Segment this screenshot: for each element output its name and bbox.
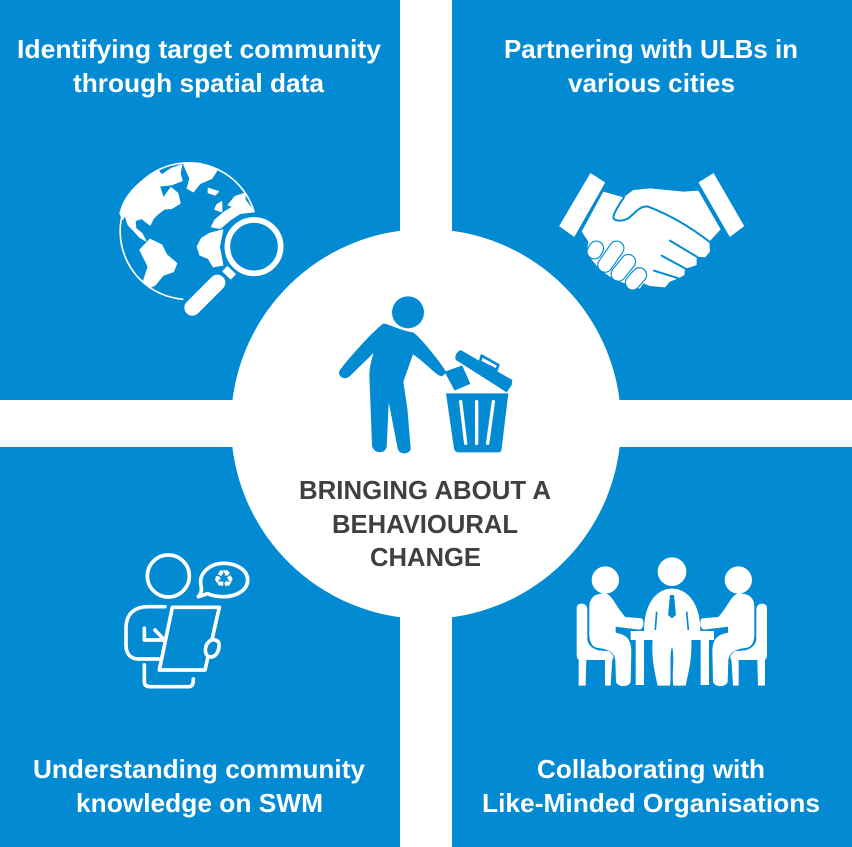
heading: behavioural change: CHANGE xyxy=(370,542,481,572)
centre circle xyxy=(231,229,621,619)
heading: behavioural change: BRINGING ABOUT A xyxy=(299,475,551,505)
icon: person reading with recycling speech bubble xyxy=(126,555,248,687)
heading: community knowledge: knowledge on SWM xyxy=(76,788,323,818)
heading: ULB partners xyxy=(504,34,798,98)
icon: globe with magnifying glass xyxy=(120,163,286,308)
heading: ULB partners: Partnering with ULBs in xyxy=(504,34,798,64)
panel: community knowledge xyxy=(0,447,400,847)
icon: three people meeting at a table xyxy=(577,557,766,686)
panel: collaboration xyxy=(452,447,852,847)
heading: behavioural change: BEHAVIOURAL xyxy=(332,509,518,539)
icon: handshake xyxy=(560,174,743,288)
panel: spatial data xyxy=(0,0,400,400)
heading: spatial data xyxy=(17,34,382,98)
panel: ULB partners xyxy=(452,0,852,400)
heading: spatial data: Identifying target community xyxy=(17,34,382,64)
heading: collaboration: Collaborating with xyxy=(537,754,765,784)
heading: community knowledge xyxy=(33,754,366,818)
icon: person throwing rubbish in a bin xyxy=(340,296,512,453)
heading: ULB partners: various cities xyxy=(568,68,735,98)
heading: collaboration xyxy=(482,754,820,818)
heading: collaboration: Like-Minded Organisations xyxy=(482,788,820,818)
heading: behavioural change xyxy=(299,475,551,572)
icon: person reading with recycling speech bubble: ♻ xyxy=(213,565,234,593)
heading: community knowledge: Understanding community xyxy=(33,754,366,784)
heading: spatial data: through spatial data xyxy=(73,68,325,98)
